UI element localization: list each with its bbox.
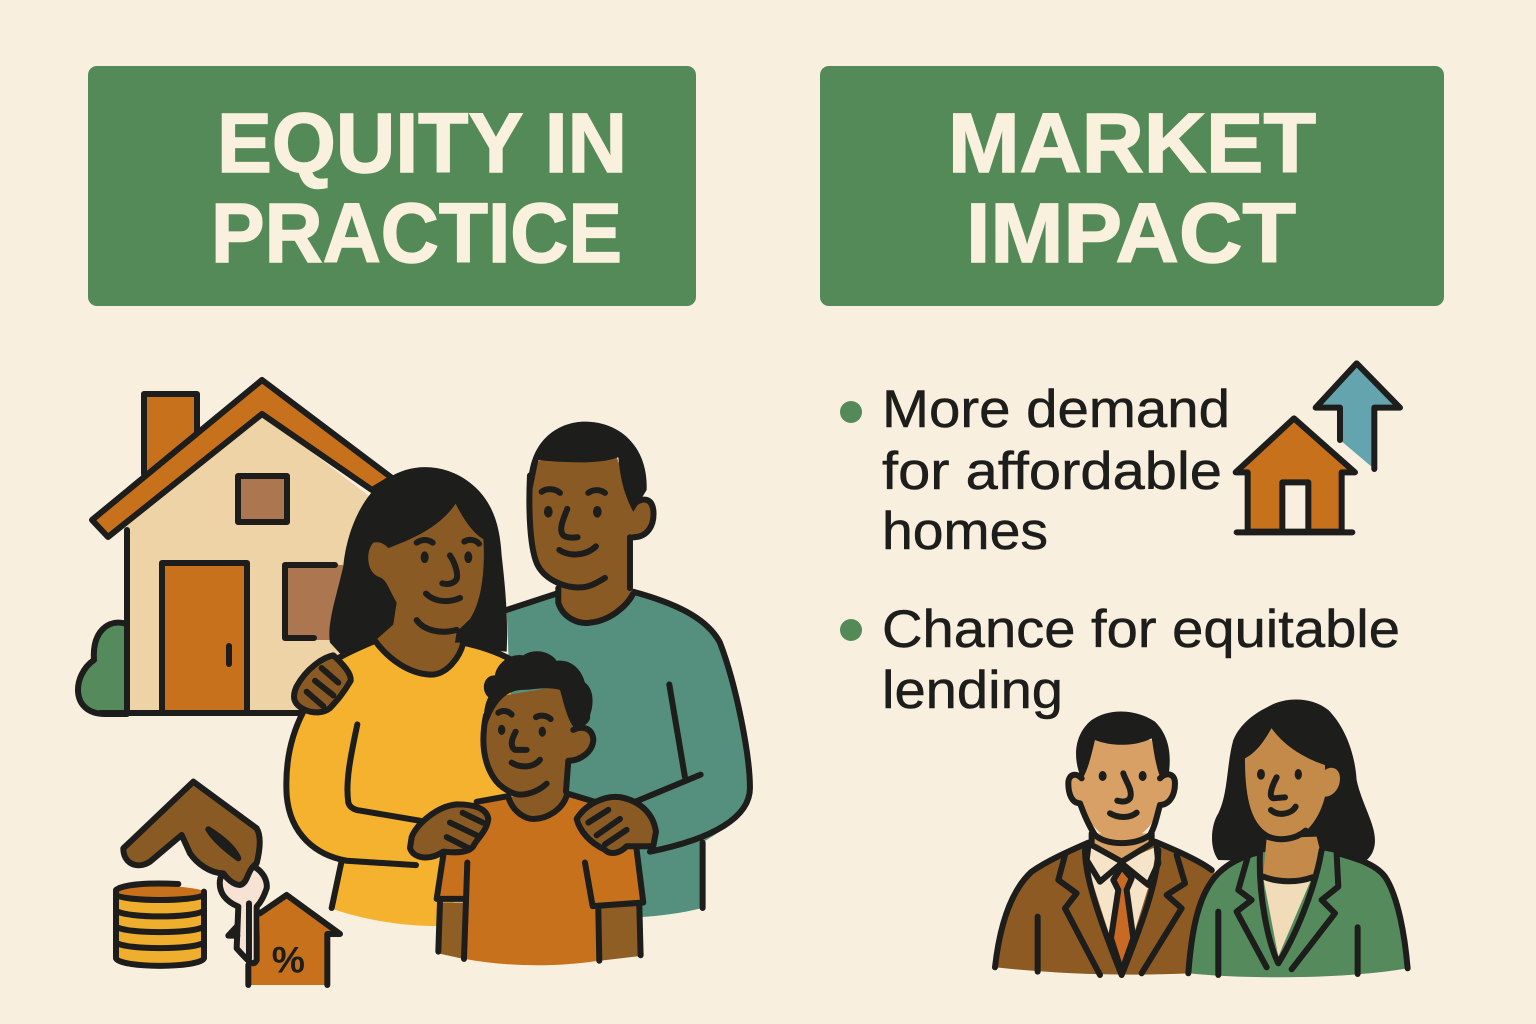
panel: Equity in Practice heading: EQUITY IN: [217, 96, 627, 190]
icon: key: [220, 865, 267, 963]
illustration: two lending professionals: [995, 700, 1408, 977]
panel: Market Impact heading: IMPACT: [966, 186, 1296, 280]
bullet: equitable lending: Chance for equitable: [882, 600, 1400, 659]
panel: Equity in Practice heading: PRACTICE: [211, 186, 622, 280]
icon: orange house: [1236, 418, 1355, 532]
bullet list: market impact points: [840, 380, 1400, 720]
icon: hand on mother's shoulder: [294, 655, 351, 712]
bullet: more demand: [840, 380, 1230, 561]
icon: father's hand on child: [577, 797, 656, 853]
icon: percent house: [248, 895, 340, 985]
bullet: equitable lending: lending: [882, 661, 1063, 720]
illustration: family group: [286, 422, 750, 965]
bullet: more demand: More demand: [882, 380, 1230, 439]
icon: percent house: %: [272, 939, 305, 981]
icon: house with rising arrow: [1236, 363, 1400, 532]
panel: Market Impact heading: [820, 66, 1444, 306]
panel: Market Impact heading: MARKET: [948, 96, 1316, 190]
bullet: equitable lending: [840, 600, 1400, 720]
figure: mother: [286, 467, 513, 926]
figure: child: [437, 651, 643, 965]
icon: hand: [123, 782, 260, 885]
illustration: hand passing key with coins and percent house: [116, 782, 340, 985]
icon: mother's hand on child: [410, 804, 488, 857]
illustration: house with bush: [78, 380, 400, 714]
panel: Equity in Practice heading: [88, 66, 696, 306]
figure: man in suit: [995, 711, 1215, 975]
icon: up arrow: [1316, 363, 1400, 469]
figure: father: [507, 422, 750, 917]
icon: coin stack: [116, 884, 204, 966]
bullet: more demand: homes: [882, 502, 1048, 561]
figure: woman in green jacket: [1188, 700, 1408, 977]
bullet: more demand: for affordable: [882, 442, 1222, 501]
